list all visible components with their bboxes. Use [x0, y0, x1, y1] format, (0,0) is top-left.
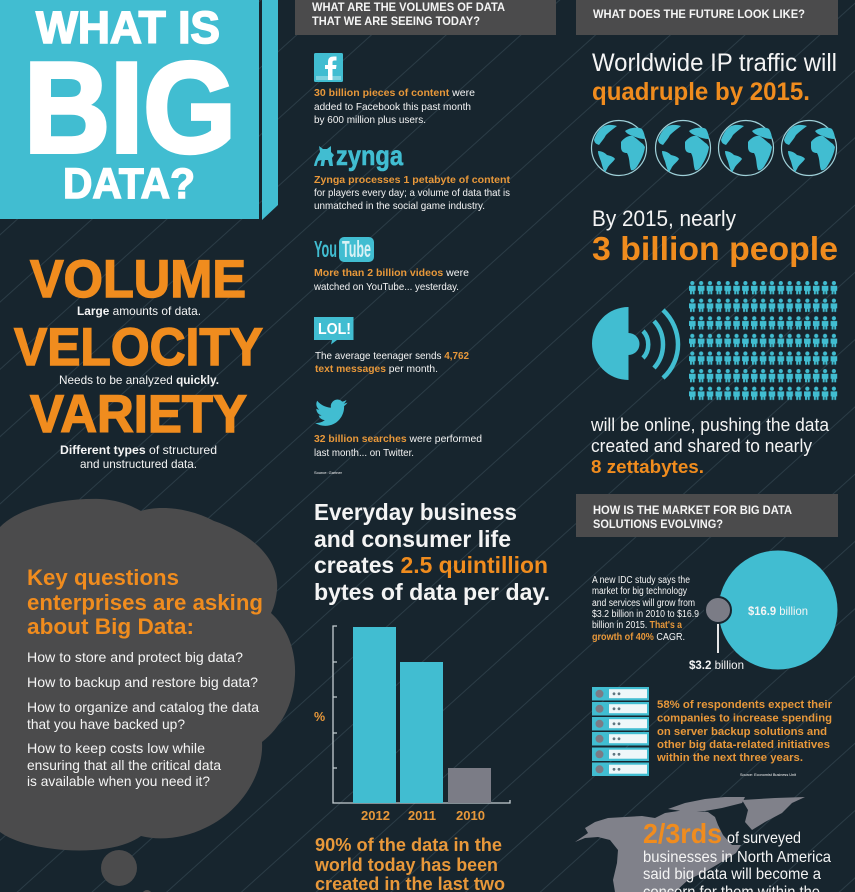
- 3 billion people headline: [592, 206, 838, 267]
- three Vs: Large amounts of data.: [77, 304, 201, 318]
- title block: WHAT IS: [36, 2, 220, 53]
- facebook stat: added to Facebook this past month: [314, 101, 471, 113]
- server spending stat: other big data-related initiatives: [657, 739, 830, 751]
- icon: facebook: [314, 53, 343, 82]
- headline: 2.5 quintillion bytes: [314, 499, 550, 605]
- bar chart: 2011: [408, 809, 436, 823]
- header: volumes of data: WHAT ARE THE VOLUMES OF DATA: [312, 0, 505, 14]
- 2/3rds stat: said big data will become a: [643, 866, 821, 883]
- online text: [590, 414, 830, 477]
- header: market: [576, 494, 838, 537]
- bar chart: %: [314, 710, 325, 724]
- text message stat: text messages per month.: [315, 363, 438, 375]
- 2/3rds stat: businesses in North America: [643, 849, 831, 866]
- server spending stat: companies to increase spending: [657, 712, 832, 724]
- IP traffic headline: Worldwide IP traffic will: [592, 49, 837, 77]
- thought cloud: key questions: How to backup and restore big data?: [27, 674, 258, 690]
- IDC study text: growth of 40% CAGR.: [592, 632, 685, 643]
- header: volumes of data: THAT WE ARE SEEING TODAY?: [312, 14, 480, 28]
- 2/3rds stat: of surveyed: [727, 830, 801, 847]
- headline: 2.5 quintillion bytes: and consumer life: [314, 526, 511, 552]
- icon: zynga logo: zynga: [336, 140, 403, 171]
- server spending stat: 58% of respondents expect their: [657, 699, 833, 711]
- IDC study text: A new IDC study says the: [592, 575, 690, 586]
- server spending stat: within the next three years.: [656, 752, 803, 764]
- youtube stat: watched on YouTube... yesterday.: [313, 281, 459, 293]
- bubble comparison chart: $3.2 billion: [689, 658, 744, 672]
- online text: created and shared to nearly: [591, 435, 813, 456]
- online text: will be online, pushing the data: [590, 414, 830, 435]
- zynga stat: [314, 174, 510, 212]
- icon: four globes: [592, 120, 836, 176]
- youtube stat: More than 2 billion videos were: [314, 267, 469, 279]
- bubble comparison chart: $16.9 billion: [748, 604, 808, 618]
- icon: youtube logo: You: [314, 236, 337, 262]
- three Vs: [14, 250, 263, 471]
- 2/3rds stat: 2/3rds: [643, 818, 722, 849]
- icon: LOL speech bubble: [314, 317, 354, 344]
- thought cloud: key questions: Key questions: [27, 565, 179, 590]
- text message stat: [315, 350, 469, 375]
- thought cloud: key questions: How to keep costs low while: [27, 740, 205, 756]
- twitter stat: [314, 433, 482, 475]
- zynga stat: unmatched in the social game industry.: [314, 200, 485, 212]
- three Vs: Different types of structured: [60, 443, 217, 457]
- three Vs: and unstructured data.: [80, 457, 197, 471]
- thought cloud: key questions: [0, 499, 295, 892]
- facebook stat: [314, 87, 475, 126]
- 3 billion people headline: By 2015, nearly: [592, 206, 736, 231]
- header: future: [576, 0, 838, 35]
- title block: BIG: [24, 36, 236, 180]
- IDC study text: $3.2 billion in 2010 to $16.9: [592, 609, 699, 620]
- IP traffic headline: [592, 49, 837, 106]
- zynga stat: for players every day; a volume of data that is: [314, 187, 510, 199]
- server spending stat: [656, 699, 833, 777]
- three Vs: VOLUME: [30, 250, 246, 309]
- callout: 90% of data: [314, 834, 505, 892]
- headline: 2.5 quintillion bytes: Everyday business: [314, 499, 517, 525]
- twitter stat: 32 billion searches were performed: [314, 433, 482, 445]
- thought cloud: key questions: about Big Data:: [27, 614, 194, 639]
- header: future: WHAT DOES THE FUTURE LOOK LIKE?: [593, 9, 805, 21]
- thought cloud: key questions: How to store and protect big data?: [27, 649, 243, 665]
- thought cloud: key questions: is available when you need it?: [27, 773, 210, 789]
- facebook stat: 30 billion pieces of content were: [314, 87, 475, 99]
- three Vs: VELOCITY: [14, 318, 263, 377]
- twitter stat: Source: Gartner: [314, 470, 343, 475]
- three Vs: VARIETY: [30, 385, 247, 444]
- thought cloud: key questions: How to organize and catalog the data: [27, 699, 259, 715]
- bar chart: [314, 626, 510, 823]
- three Vs: Needs to be analyzed quickly.: [59, 373, 219, 387]
- icon: speaker with sound waves: [592, 307, 678, 380]
- server spending stat: Source: Economist Business Unit: [740, 772, 797, 777]
- IP traffic headline: quadruple by 2015.: [592, 78, 810, 106]
- twitter stat: last month... on Twitter.: [314, 447, 414, 459]
- online text: 8 zettabytes.: [591, 456, 704, 477]
- header: volumes of data: [295, 0, 556, 35]
- server spending stat: on server backup solutions and: [657, 726, 827, 738]
- IDC study text: and services will grow from: [592, 598, 695, 609]
- 3 billion people headline: 3 billion people: [592, 230, 838, 267]
- IDC study text: [592, 575, 699, 643]
- 2/3rds stat: [643, 818, 831, 892]
- icon: server stack: [592, 687, 649, 776]
- facebook stat: by 600 million plus users.: [314, 114, 426, 126]
- callout: 90% of data: world today has been: [314, 854, 498, 875]
- text message stat: The average teenager sends 4,762: [315, 350, 469, 362]
- bar chart: 2012: [361, 809, 390, 823]
- title block: DATA?: [63, 160, 195, 208]
- youtube stat: [313, 267, 469, 293]
- thought cloud: key questions: enterprises are asking: [27, 590, 263, 615]
- thought cloud: key questions: ensuring that all the critical data: [27, 757, 221, 773]
- icon: twitter bird: [315, 400, 347, 426]
- callout: 90% of data: 90% of the data in the: [315, 834, 502, 855]
- bubble comparison chart: [689, 550, 838, 672]
- IDC study text: billion in 2015. That's a: [592, 620, 682, 631]
- icon: LOL speech bubble: LOL!: [318, 321, 351, 338]
- IDC study text: market for big technology: [592, 586, 687, 597]
- zynga stat: Zynga processes 1 petabyte of content: [314, 174, 510, 186]
- bar chart: 2010: [456, 809, 485, 823]
- icon: youtube logo: [314, 236, 374, 262]
- title block: [0, 0, 278, 220]
- people grid: [689, 281, 839, 404]
- header: market: HOW IS THE MARKET FOR BIG DATA: [593, 503, 792, 517]
- icon: zynga logo: [314, 140, 403, 171]
- headline: 2.5 quintillion bytes: bytes of data per day.: [314, 579, 550, 605]
- header: market: SOLUTIONS EVOLVING?: [593, 517, 723, 531]
- icon: youtube logo: Tube: [342, 236, 371, 262]
- headline: 2.5 quintillion bytes: creates 2.5 quintillion: [314, 552, 548, 578]
- thought cloud: key questions: that you have backed up?: [27, 716, 185, 732]
- map: north america: [575, 797, 805, 892]
